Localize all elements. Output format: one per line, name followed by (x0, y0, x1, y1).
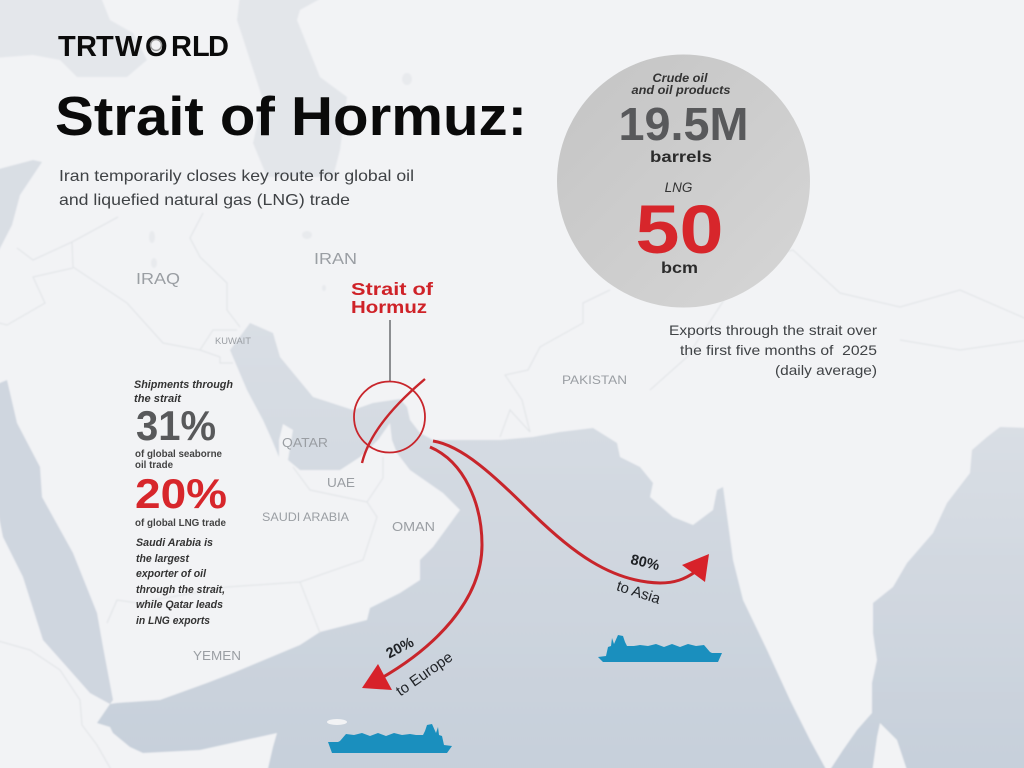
exports note: (daily average) (775, 362, 877, 378)
label: 20% to Europe: 20% (384, 635, 417, 662)
strait leader line (389, 320, 391, 381)
exporters note: through the strait, (136, 584, 225, 596)
country labels (136, 251, 627, 663)
oil caption (632, 71, 731, 97)
country labels: YEMEN (193, 648, 241, 663)
oil unit: barrels (650, 149, 712, 166)
country labels: KUWAIT (215, 336, 252, 346)
sea: Bay of Bengal (828, 427, 1024, 768)
country labels: UAE (327, 475, 355, 490)
sea: Persian Gulf, Gulf of Oman and Arabian Sea (97, 323, 828, 768)
LNG caption: LNG (665, 180, 692, 195)
exports note (669, 322, 877, 378)
exporters note: exporter of oil (136, 568, 207, 580)
exporters note: in LNG exports (136, 615, 210, 627)
label: 20% to Europe: to Europe (393, 649, 456, 700)
icon: LNG tanker west (328, 724, 452, 753)
sea: Caspian (237, 0, 347, 177)
strait marker: circle with slash (354, 379, 425, 463)
arrow: to Asia (433, 441, 709, 583)
exports note: the first five months of 2025 (680, 342, 877, 358)
label: 20% to Europe (384, 635, 456, 700)
arrow: to Europe (362, 447, 482, 690)
exporters note: the largest (136, 553, 190, 565)
oil share caption: of global seaborne (135, 448, 222, 460)
strait label: Strait of (351, 279, 433, 299)
strait label (351, 279, 433, 317)
subtitle: and liquefied natural gas (LNG) trade (59, 192, 350, 209)
subtitle (59, 168, 414, 209)
shipments heading: the strait (134, 393, 182, 405)
LNG unit: bcm (661, 260, 698, 277)
country labels: IRAQ (136, 271, 180, 288)
exports note: Exports through the strait over (669, 322, 877, 338)
subtitle: Iran temporarily closes key route for global oil (59, 168, 414, 185)
oil figure: 19.5M (618, 98, 748, 150)
country labels: SAUDI ARABIA (262, 510, 349, 524)
LNG figure: 50 (636, 191, 724, 268)
country labels: QATAR (282, 435, 328, 450)
strait label: Hormuz (351, 297, 427, 317)
sea: Red Sea (0, 380, 113, 704)
logo: TRT World: TRTWORLD (58, 31, 229, 63)
oil share caption (135, 448, 222, 471)
panel: shipments text (134, 379, 233, 627)
LNG share: 20% (135, 470, 227, 517)
label: 80% to Asia: to Asia (614, 578, 663, 608)
exporters note (136, 537, 225, 627)
country labels: OMAN (392, 519, 435, 534)
shipments heading (134, 379, 233, 405)
icon: LNG tanker east (598, 635, 722, 662)
oil caption: Crude oil (652, 71, 708, 85)
shipments heading: Shipments through (134, 379, 233, 391)
oil share: 31% (136, 402, 216, 449)
oil caption: and oil products (632, 83, 731, 97)
sea: Black Sea (0, 0, 147, 77)
panel: export figures circle (557, 54, 810, 308)
LNG share caption: of global LNG trade (135, 517, 226, 529)
country labels: PAKISTAN (562, 373, 627, 387)
country labels: IRAN (314, 251, 357, 268)
logo ring (150, 40, 162, 50)
label: 80% to Asia (614, 552, 663, 608)
exporters note: Saudi Arabia is (136, 537, 213, 549)
inland lakes (149, 73, 412, 291)
island: Socotra (327, 719, 347, 725)
title: Strait of Hormuz: (55, 85, 527, 147)
sea: Mediterranean (0, 160, 42, 258)
oil share caption: oil trade (135, 459, 173, 471)
exporters note: while Qatar leads (136, 599, 223, 611)
label: 80% to Asia: 80% (629, 552, 661, 574)
country borders (0, 213, 1024, 768)
